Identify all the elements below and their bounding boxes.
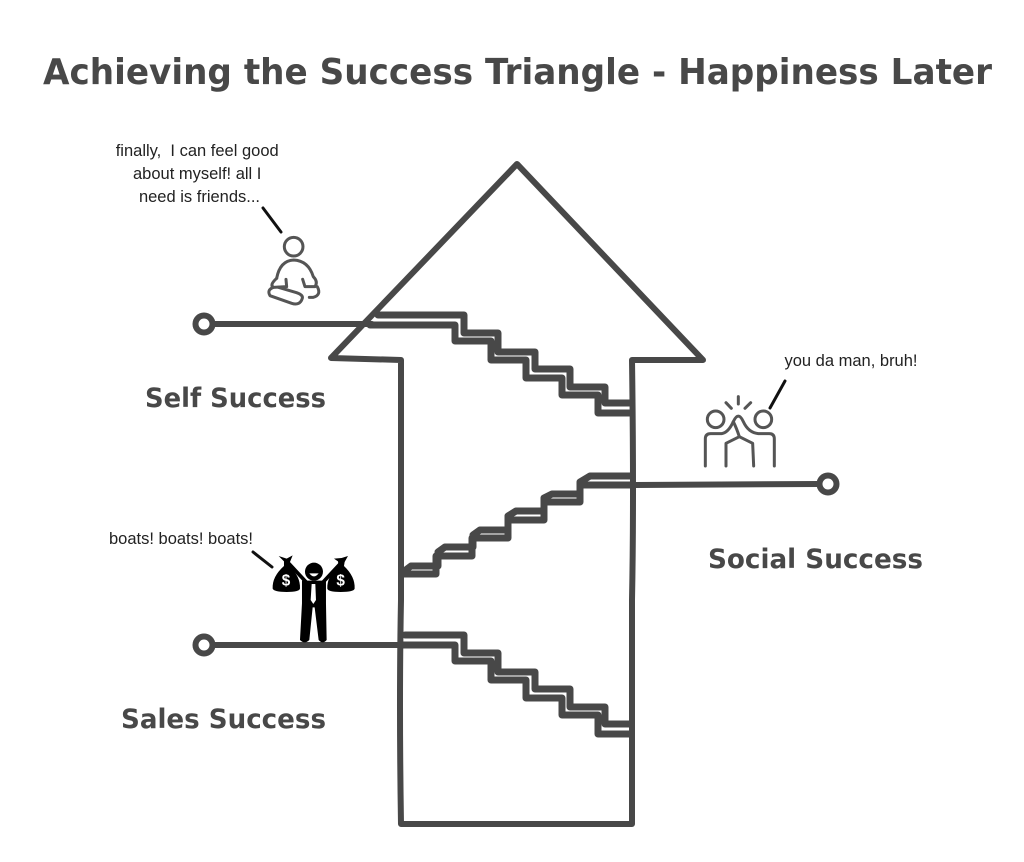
speech: self success: finally, I can feel good [116,142,279,160]
arms [289,564,340,583]
heading: social success: Social Success [708,544,923,575]
speech: self success: need is friends... [139,188,260,206]
icon: meditating person [269,237,319,304]
icon: businessman with money bags: $ [336,572,345,589]
arrow outline [331,164,703,824]
middle staircase: social success [403,476,630,574]
callout tick: self success [263,208,281,232]
callout tick: social success [770,381,785,408]
title: Achieving the Success Triangle - Happiness Later [43,52,992,93]
speech: social success: you da man, bruh! [784,352,918,370]
heading: sales success: Sales Success [121,704,326,735]
speech: self success: about myself! all I [133,165,261,183]
callout tick: sales success [253,552,272,567]
right bag [327,556,355,592]
icon: two people high-fiving [705,397,774,466]
heading: self success: Self Success [145,383,326,414]
lower staircase: sales success [403,635,630,734]
man [305,563,323,581]
icon: businessman with money bags [273,555,355,642]
connector: self success line [196,316,372,332]
dollar signs: $ [282,572,291,589]
upper staircase: self success [370,315,630,413]
speech: sales success: boats! boats! boats! [109,530,253,548]
connector: sales success line [196,636,403,654]
left bag [273,555,300,592]
connector: social success line [632,476,836,492]
